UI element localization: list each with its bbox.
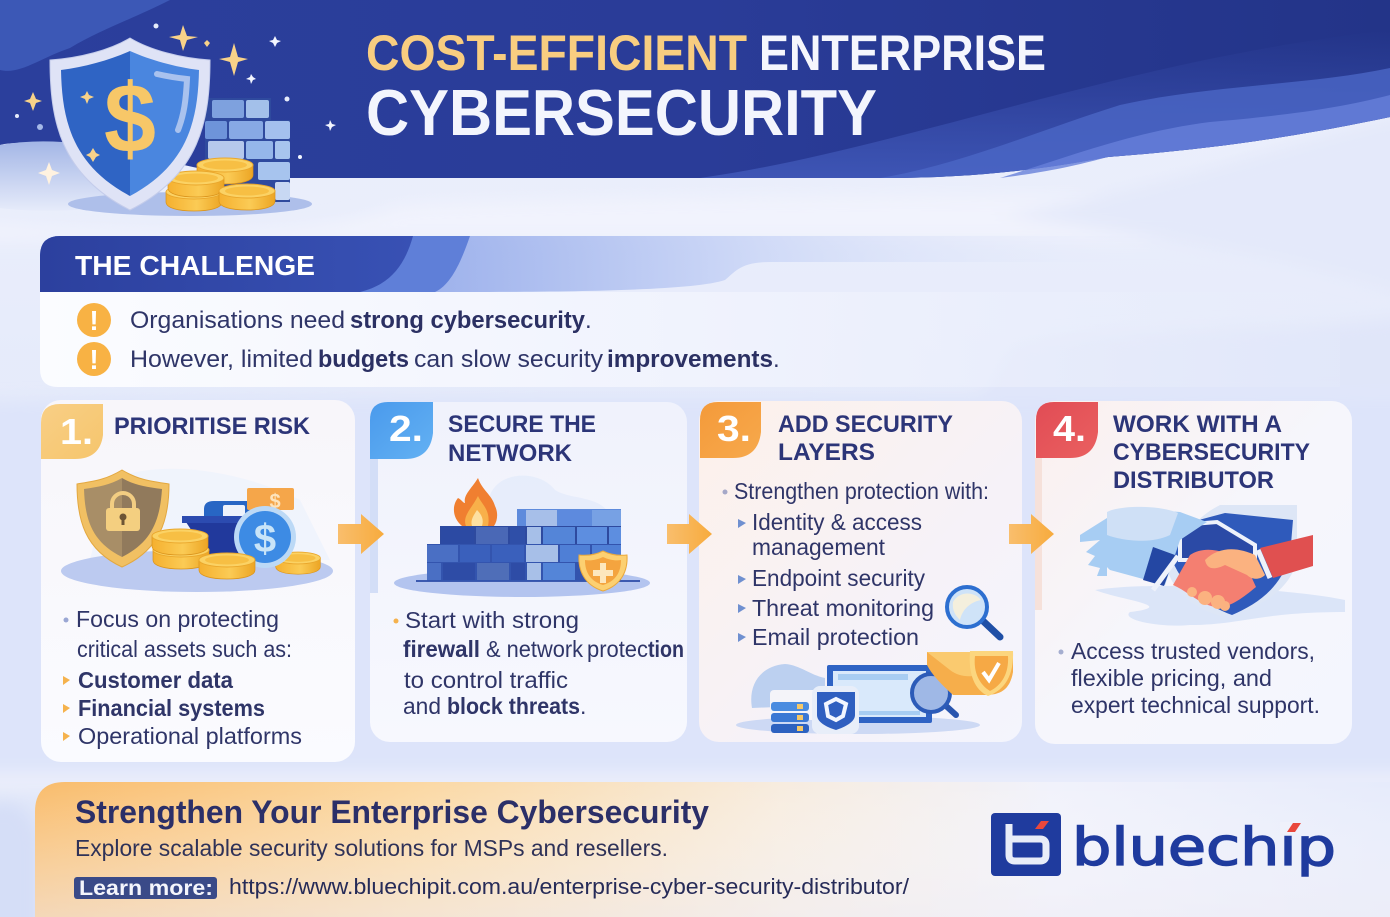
blue coin: $ xyxy=(254,517,276,561)
title: ENTERPRISE xyxy=(759,25,1046,81)
warning icon xyxy=(77,342,111,376)
server xyxy=(771,702,809,733)
challenge line 2: budgets xyxy=(318,346,409,373)
blue sleeve and hand xyxy=(1080,507,1207,586)
logo: bluechip xyxy=(991,813,1336,878)
badge 1 xyxy=(41,404,103,459)
wall xyxy=(427,509,621,581)
body text: tion xyxy=(648,636,684,662)
link url: https://www.bluechipit.com.au/enterprise-cyber-security-distributor/ xyxy=(229,874,910,899)
challenge line 2: . xyxy=(773,346,780,373)
body text: Start with strong xyxy=(405,607,579,633)
ground shadow xyxy=(68,192,312,216)
body text: Strengthen protection with: xyxy=(734,478,989,504)
heading: ADD SECURITY xyxy=(778,411,953,438)
dollar sign: $ xyxy=(104,63,156,173)
challenge line 1: Organisations need xyxy=(130,307,345,334)
brick wall xyxy=(205,98,290,202)
blue coin xyxy=(234,506,296,568)
warning icon: ! xyxy=(89,305,99,336)
coin stack xyxy=(152,529,209,569)
small magnifier xyxy=(912,674,956,715)
badge 2 xyxy=(370,402,433,459)
learn more label: Learn more: xyxy=(79,877,213,900)
blue safe xyxy=(182,501,266,557)
red sleeve xyxy=(1260,535,1313,578)
icon: magnifying glass xyxy=(947,587,1000,637)
hands xyxy=(1173,549,1265,611)
body text xyxy=(394,607,684,719)
arrow 2 to 3 xyxy=(667,514,712,554)
heading xyxy=(448,411,596,467)
monitor xyxy=(827,665,932,723)
body text xyxy=(722,478,989,650)
heading: PRIORITISE RISK xyxy=(114,413,311,440)
badge 3: 3. xyxy=(717,408,751,449)
body text: to control traffic xyxy=(404,667,568,693)
gold coins xyxy=(166,158,275,211)
panel: card 3 add security layers xyxy=(699,401,1022,742)
challenge line 2: improvements xyxy=(607,346,773,373)
challenge line 1: strong cybersecurity xyxy=(350,307,586,334)
warning icon: ! xyxy=(89,344,99,375)
body text: expert technical support. xyxy=(1071,692,1320,718)
body text: and xyxy=(403,693,441,719)
challenge line 2 xyxy=(130,346,780,373)
heading xyxy=(1113,411,1310,494)
body text: firewall xyxy=(403,636,480,662)
shield xyxy=(50,38,210,210)
heading: DISTRIBUTOR xyxy=(1113,467,1274,494)
body text: Email protection xyxy=(752,624,919,650)
body text: & network xyxy=(486,636,583,662)
shield badge xyxy=(579,551,627,591)
front coin xyxy=(199,553,255,579)
body text: management xyxy=(752,534,886,560)
sparkles xyxy=(15,24,336,185)
heading: CYBERSECURITY xyxy=(1113,439,1310,466)
envelope with shield xyxy=(927,651,1013,696)
challenge header bar xyxy=(40,236,1150,292)
body text: Financial systems xyxy=(78,695,265,721)
body text: Operational platforms xyxy=(78,723,302,749)
challenge body xyxy=(40,292,1340,387)
body text: . xyxy=(580,693,586,719)
panel: call to action banner xyxy=(35,782,1390,917)
body text: Access trusted vendors, xyxy=(1071,638,1315,664)
small coin xyxy=(276,552,320,574)
illustration: server, monitor, envelope xyxy=(736,651,1013,734)
warning icon xyxy=(77,303,111,337)
header band xyxy=(0,0,1390,178)
heading: NETWORK xyxy=(448,440,573,467)
badge 4 xyxy=(1036,402,1098,458)
badge 4: 4. xyxy=(1053,408,1086,449)
title: COST-EFFICIENT xyxy=(366,25,747,81)
heading: LAYERS xyxy=(778,439,875,466)
body text: Endpoint security xyxy=(752,565,925,591)
gold shield with lock xyxy=(77,470,169,567)
heading xyxy=(778,411,953,466)
body text: Identity & access xyxy=(752,509,922,535)
body text: critical assets such as: xyxy=(77,636,292,662)
title xyxy=(366,25,1046,149)
banner heading: Strengthen Your Enterprise Cybersecurity xyxy=(75,794,709,830)
body text: Focus on protecting xyxy=(76,606,279,632)
badge 1: 1. xyxy=(60,411,93,452)
logo: bluechip: bluechip xyxy=(1072,818,1336,878)
heading: SECURE THE xyxy=(448,411,596,438)
body text xyxy=(63,606,302,749)
arrow 1 to 2 xyxy=(338,514,384,554)
shield xyxy=(1165,505,1297,616)
left hill behind shield xyxy=(0,141,120,211)
panel: card 2 secure the network xyxy=(370,402,687,742)
body text: flexible pricing, and xyxy=(1071,665,1272,691)
arrow 3 to 4 xyxy=(1009,514,1054,554)
banner subtext: Explore scalable security solutions for MSPs and resellers. xyxy=(75,835,668,861)
challenge header bar: THE CHALLENGE xyxy=(75,250,315,281)
illustration: gold shield, padlock, coins xyxy=(61,469,333,592)
challenge line 2: can slow security xyxy=(414,346,603,373)
challenge line 2: However, limited xyxy=(130,346,313,373)
panel: the challenge xyxy=(40,236,1340,387)
body text: Threat monitoring xyxy=(752,595,934,621)
dollar tag: $ xyxy=(269,491,281,513)
title: CYBERSECURITY xyxy=(366,76,877,149)
heading: WORK WITH A xyxy=(1113,411,1282,438)
illustration: brick firewall with flame and shield xyxy=(394,476,650,597)
body text: block threats xyxy=(447,693,580,719)
body text: Customer data xyxy=(78,667,233,693)
body text xyxy=(1058,638,1320,718)
shield tile xyxy=(812,686,859,734)
panel: card 4 work with a cybersecurity distributor xyxy=(1035,401,1352,744)
challenge line 1 xyxy=(130,307,592,334)
illustration: handshake over shield xyxy=(1080,505,1345,626)
flame xyxy=(454,478,497,526)
badge 2: 2. xyxy=(389,408,423,449)
badge 3 xyxy=(700,402,761,458)
hero illustration: shield with coins and brick wall xyxy=(15,24,336,216)
dollar tag xyxy=(247,488,294,513)
panel: card 1 prioritise risk xyxy=(41,400,355,762)
challenge line 1: . xyxy=(585,307,592,334)
body text: protec xyxy=(587,636,648,662)
